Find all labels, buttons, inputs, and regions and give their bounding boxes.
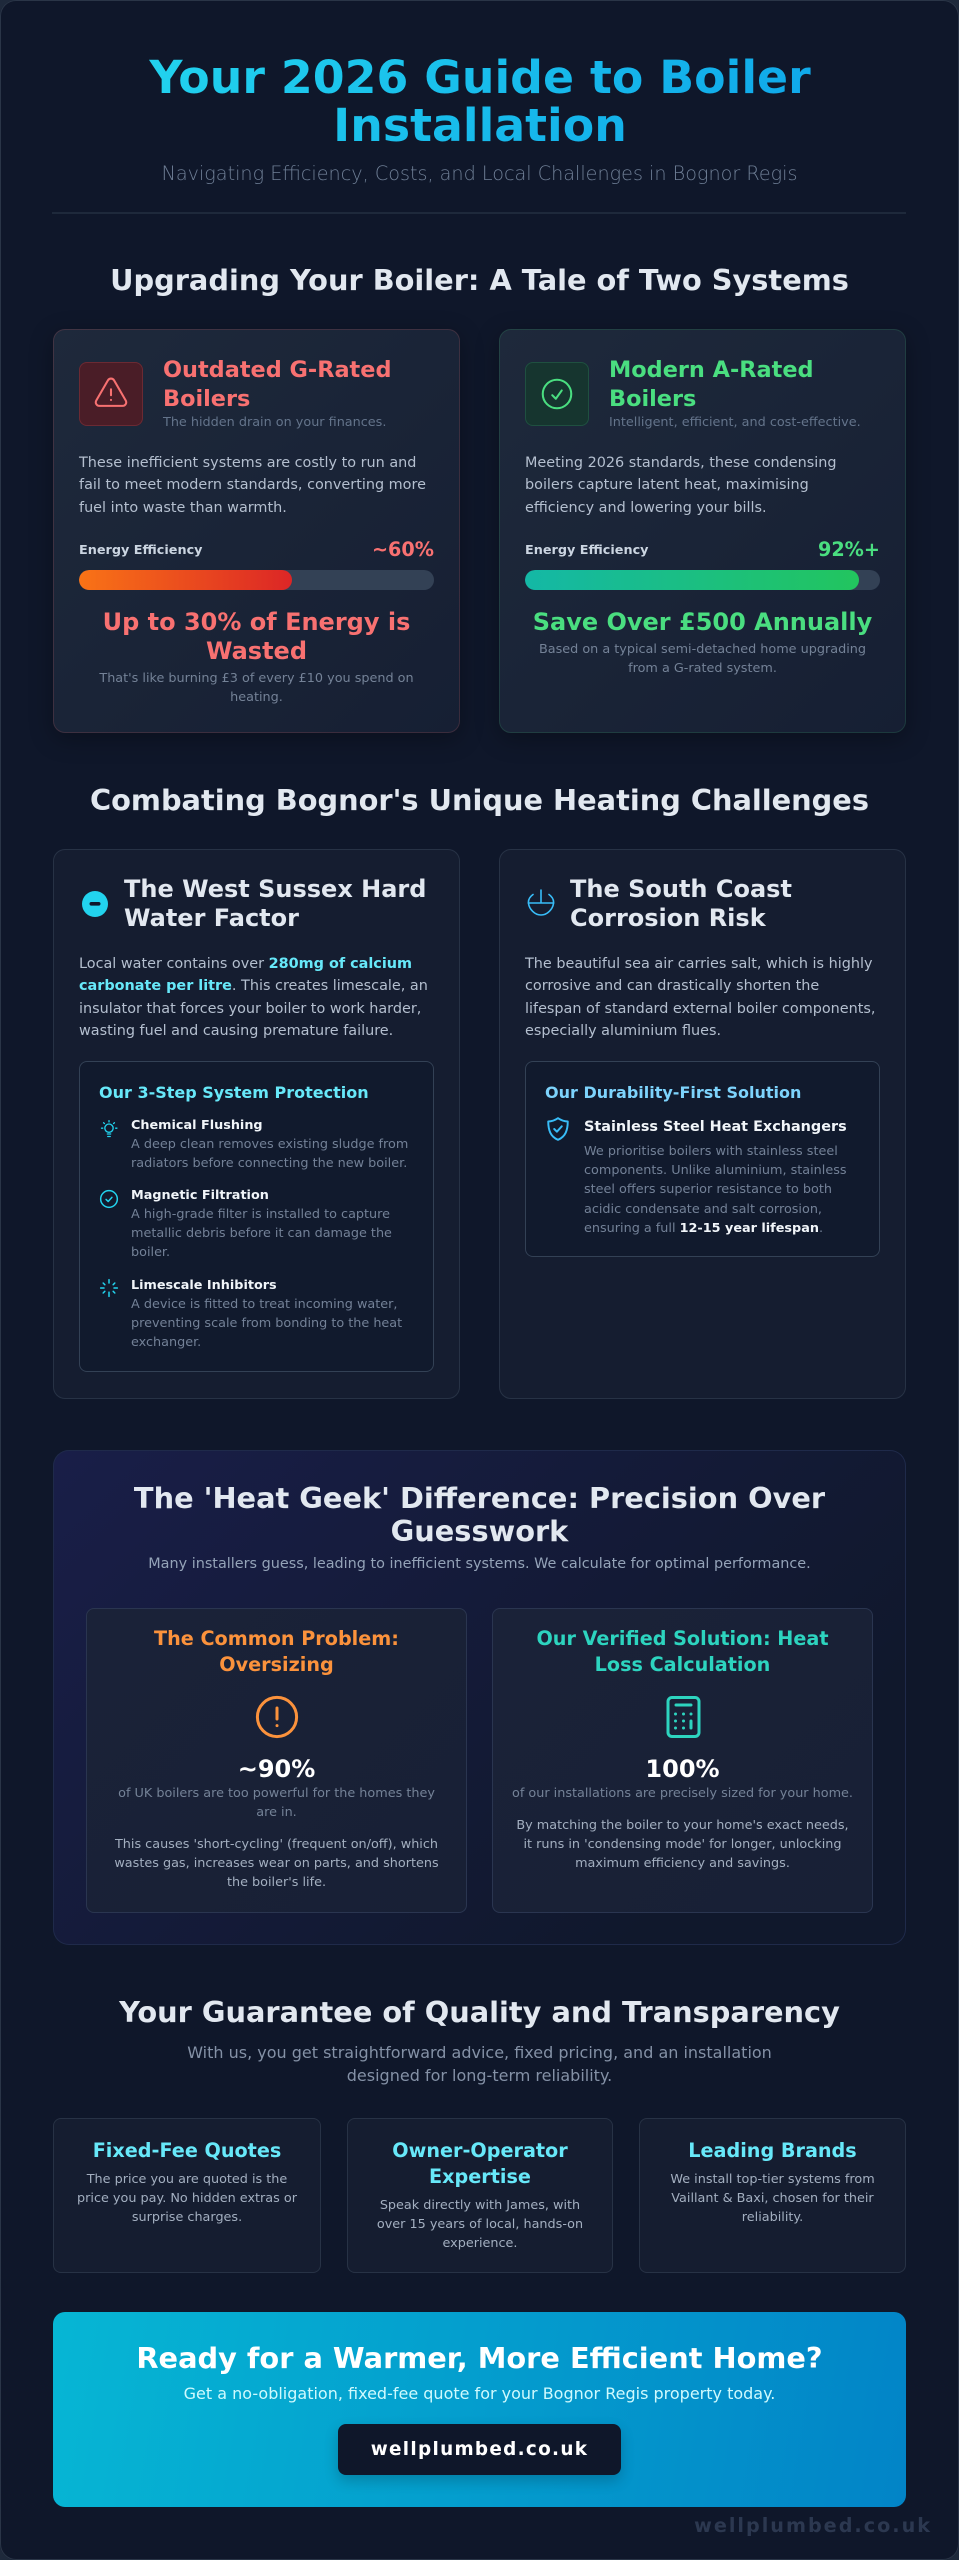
step title: Chemical Flushing [131,1118,263,1133]
callout note: heating. [230,690,283,705]
description: These inefficient systems are costly to run and [79,455,416,471]
callout: Up to 30% of Energy is [103,608,410,636]
heading: Leading Brands [688,2139,857,2162]
heading: Water Factor [124,904,299,932]
icon: calculator [666,1696,700,1738]
text: price you pay. No hidden extras or [77,2191,297,2206]
text: surprise charges. [132,2210,242,2225]
panel: fixed-fee quotes [53,2118,321,2273]
description: Meeting 2026 standards, these condensing [525,455,837,471]
step description: preventing scale from bonding to the heat [131,1316,402,1331]
explanation: By matching the boiler to your home's exact needs, [516,1818,849,1833]
description [524,956,875,1039]
icon: exclamation circle [256,1696,298,1738]
subheading: Our Durability-First Solution [545,1083,801,1102]
explanation [114,1837,439,1890]
text: over 15 years of local, hands-on [377,2217,583,2232]
subheading: Our 3-Step System Protection [99,1083,369,1102]
step description: boiler. [131,1245,170,1260]
intro text: designed for long-term reliability. [347,2066,612,2085]
callout [103,608,410,665]
title: Your 2026 Guide to Boiler [149,50,811,104]
intro text [187,2043,772,2085]
heading: Oversizing [219,1653,334,1676]
text [77,2172,297,2225]
text: Vaillant & Baxi, chosen for their [671,2191,874,2206]
explanation: This causes 'short-cycling' (frequent on/off), which [115,1837,438,1852]
description: carbonate per litre. This creates limescale, an [79,978,428,994]
button [338,2424,621,2475]
panel: owner-operator expertise [347,2118,613,2273]
heading [392,2139,568,2188]
solution description [584,1144,847,1236]
description: wasting fuel and causing premature failure. [79,1023,393,1039]
solution description: components. Unlike aluminium, stainless [584,1163,847,1178]
solution description: acidic condensate and salt corrosion, [584,1202,822,1217]
statistic: 100% [645,1755,720,1783]
panel: outdated G-rated boilers [53,329,460,733]
explanation: it runs in 'condensing mode' for longer, unlocking [524,1837,842,1852]
solution description: We prioritise boilers with stainless steel [584,1144,838,1159]
heading: Expertise [429,2165,531,2188]
heading: Ready for a Warmer, More Efficient Home? [136,2341,823,2375]
description: boilers capture latent heat, maximising [525,477,809,493]
text: Speak directly with James, with [380,2198,580,2213]
panel: corrosion [499,849,906,1399]
callout note: Based on a typical semi-detached home upgrading [539,642,866,657]
description: fail to meet modern standards, converting more [79,477,426,493]
text: reliability. [742,2210,803,2225]
text [670,2172,875,2225]
step description: A device is fitted to treat incoming water, [131,1297,397,1312]
heading [154,1627,399,1676]
heading: Boilers [609,386,696,412]
panel: the solution [492,1608,873,1913]
step description [131,1137,408,1171]
title: Installation [333,98,627,152]
icon: warning triangle [79,362,143,426]
statistic label: of UK boilers are too powerful for the homes they [118,1786,435,1801]
heading: Owner-Operator [392,2139,568,2162]
callout note: from a G-rated system. [628,661,777,676]
title [148,53,812,149]
text: Get a no-obligation, fixed-fee quote for your Bognor Regis property today. [184,2384,775,2403]
explanation [516,1818,849,1871]
subtitle: Navigating Efficiency, Costs, and Local Challenges in Bognor Regis [162,162,797,185]
icon: check circle [525,362,589,426]
step description: exchanger. [131,1335,201,1350]
description: especially aluminium flues. [525,1023,721,1039]
heading: Our Verified Solution: Heat [536,1627,828,1650]
intro text: Many installers guess, leading to inefficient systems. We calculate for optimal performance. [148,1556,811,1572]
explanation: the boiler's life. [227,1875,326,1890]
heading: Boilers [163,386,250,412]
description: corrosive and can drastically shorten the [525,978,819,994]
step description: A high-grade filter is installed to capture [131,1207,390,1222]
heading [163,356,391,412]
callout: Save Over £500 Annually [533,608,872,636]
heading: Modern A-Rated [609,356,814,382]
statistic label: are in. [256,1805,297,1820]
heading: The 'Heat Geek' Difference: Precision Over [134,1480,825,1514]
icon: no-entry drop [82,891,108,917]
description: lifespan of standard external boiler components, [525,1001,875,1017]
step description [131,1297,402,1350]
text: We install top-tier systems from [670,2172,875,2187]
heading: The Common Problem: [154,1627,399,1650]
heading [570,875,792,932]
icon: sparkle [100,1278,118,1298]
watermark: wellplumbed.co.uk [694,2514,932,2537]
description: efficiency and lowering your bills. [525,500,767,516]
step title: Limescale Inhibitors [131,1278,277,1293]
heading: The South Coast [570,875,792,903]
solution description: steel offers superior resistance to both [584,1182,832,1197]
efficiency bar [79,570,434,590]
statistic label: of our installations are precisely sized for your home. [512,1786,853,1801]
panel: durability solution [525,1061,880,1257]
subheading: Intelligent, efficient, and cost-effective. [609,415,861,430]
statistic label [118,1786,435,1820]
heading: Outdated G-Rated [163,356,391,382]
callout note [539,642,866,676]
description: Local water contains over 280mg of calcium [79,956,412,972]
text: The price you are quoted is the [87,2172,287,2187]
heading: Corrosion Risk [570,904,766,932]
subheading: The hidden drain on your finances. [163,415,386,430]
step title: Magnetic Filtration [131,1188,269,1203]
heading: Fixed-Fee Quotes [93,2139,281,2162]
description [525,455,837,516]
heading [124,875,426,932]
icon: shield [547,1117,569,1141]
description: The beautiful sea air carries salt, which is highly [525,956,873,972]
value: 92 percent: 92%+ [818,538,880,561]
step description: A deep clean removes existing sludge from [131,1137,408,1152]
panel: 3-step protection [79,1061,434,1372]
callout note: That's like burning £3 of every £10 you spend on [99,671,414,686]
heading: Guesswork [391,1514,568,1548]
callout: Wasted [206,637,307,665]
heading [536,1627,828,1676]
panel: hard water [53,849,460,1399]
label: Energy Efficiency [525,543,649,558]
description [78,455,426,516]
icon: flue [528,889,554,916]
statistic: ~90% [238,1755,315,1783]
panel: heat geek difference [53,1450,906,1945]
section heading: local challenges: Combating Bognor's Unique Heating Challenges [90,783,869,817]
intro text: With us, you get straightforward advice, fixed pricing, and an installation [187,2043,772,2062]
solution title: Stainless Steel Heat Exchangers [584,1119,847,1135]
panel: the problem [86,1608,467,1913]
heading [134,1480,825,1548]
section heading: two systems: Upgrading Your Boiler: A Tale of Two Systems [110,263,849,297]
value: 60 percent: ~60% [372,538,434,561]
step description: radiators before connecting the new boiler. [131,1156,407,1171]
explanation: wastes gas, increases wear on parts, and shortens [114,1856,439,1871]
step description: metallic debris before it can damage the [131,1226,392,1241]
section heading: guarantee: Your Guarantee of Quality and Transparency [119,1995,840,2029]
solution description: ensuring a full 12-15 year lifespan. [584,1221,823,1236]
callout note [99,671,414,705]
efficiency bar [525,570,880,590]
label: Energy Efficiency [79,543,203,558]
step description [131,1207,392,1260]
icon: light bulb [100,1120,118,1138]
panel: modern A-rated boilers [499,329,906,733]
description: insulator that forces your boiler to work harder, [79,1001,421,1017]
description: fuel into waste than warmth. [79,500,287,516]
panel: leading brands [639,2118,906,2273]
description [79,956,428,1039]
text: experience. [442,2236,518,2251]
call to action panel [53,2312,906,2507]
heading: The West Sussex Hard [124,875,426,903]
button: wellplumbed.co.uk [371,2439,588,2460]
heading [609,356,814,412]
text [377,2198,583,2251]
heading: Loss Calculation [595,1653,770,1676]
explanation: maximum efficiency and savings. [575,1856,790,1871]
icon: check circle [100,1190,118,1208]
